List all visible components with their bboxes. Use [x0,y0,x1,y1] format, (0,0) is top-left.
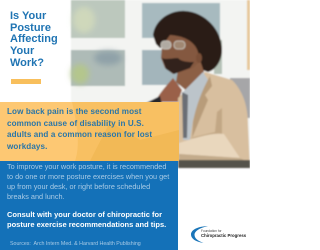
jacket [178,72,250,168]
logo: Foundation for Chiropractic Progress: Chiropractic Progress [201,233,246,238]
body paragraph [7,162,170,201]
title [10,10,58,69]
title: Affecting [10,33,58,45]
title: Work? [10,57,44,69]
body paragraph: to do one or more posture exercises when you get [7,172,169,181]
icon: logo arc [191,226,208,243]
callout text [7,107,152,151]
arm shadow [190,108,222,140]
tie [182,92,188,138]
hair [153,11,222,72]
consult text [7,210,166,229]
title: Posture [10,22,51,34]
body paragraph: To improve your work posture, it is recommended [7,162,166,171]
consult text: Consult with your doctor of chiropractic for [7,210,162,219]
accent bar [11,79,41,84]
title: Is Your [10,10,46,22]
body paragraph: up from your desk, or right before scheduled [7,182,150,191]
beard [162,58,194,74]
table [178,160,250,168]
callout text: Low back pain is the second most [7,107,142,116]
sources: Sources: Arch Intern Med. & Harvard Health Publishing [10,241,141,247]
glasses [161,41,171,49]
shirt [183,72,208,140]
panel: blue text panel [0,161,178,250]
title: Your [10,45,34,57]
callout text: adults and a common reason for lost [7,130,152,139]
forearm [179,134,240,158]
neck [176,60,204,92]
lapel [192,76,212,138]
face [161,35,199,74]
photo: man at window holding neck [67,0,250,169]
logo text: Foundation for [201,229,222,233]
logo: Foundation for Chiropractic Progress [191,226,246,243]
panel: yellow callout [0,102,179,161]
body paragraph: breaks and lunch. [7,192,65,201]
callout text: common cause of disability in U.S. [7,119,144,128]
hand [155,78,182,102]
consult text: posture exercise recommendations and tips. [7,220,166,229]
callout text: workdays. [7,142,48,151]
